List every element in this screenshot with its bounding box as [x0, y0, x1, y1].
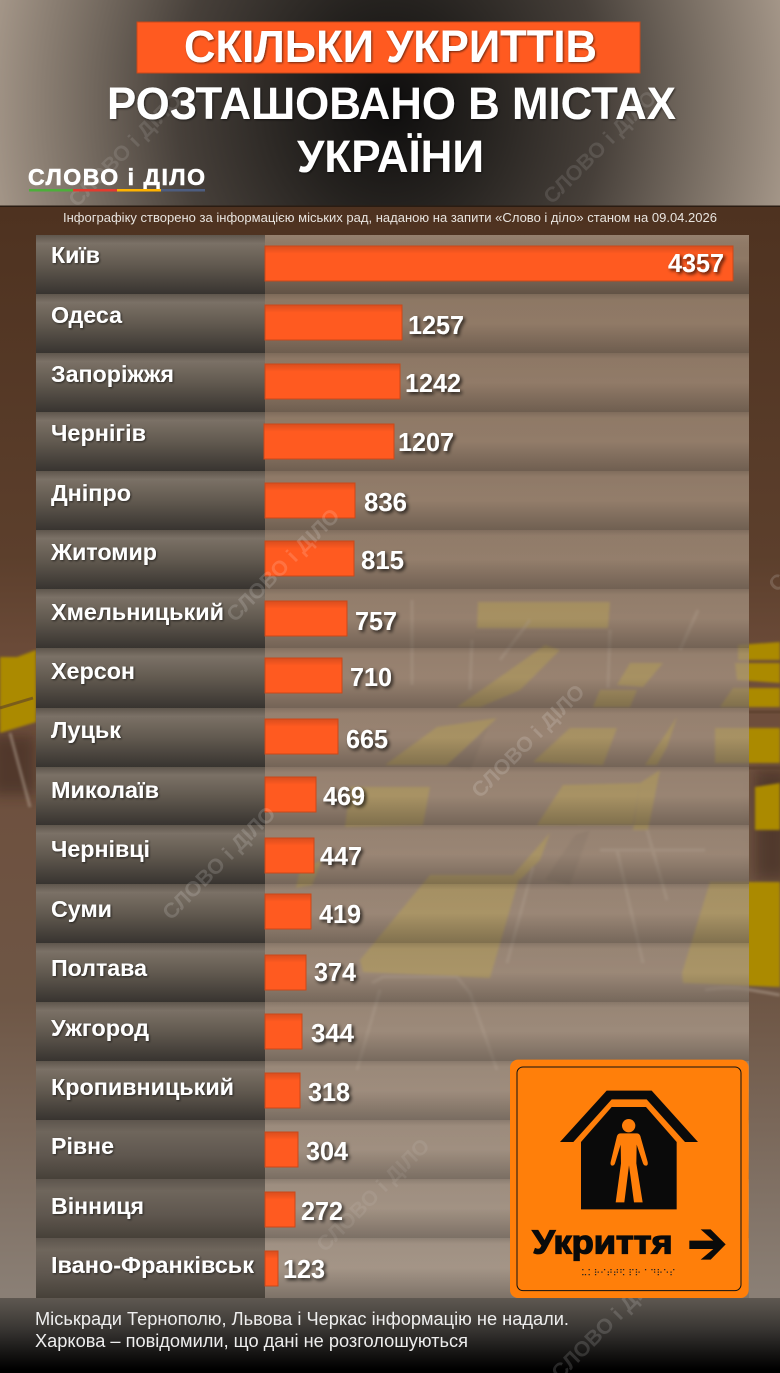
row: Дніпро — [36, 471, 749, 530]
row: Кропивницький: Кропивницький — [51, 1074, 234, 1100]
footer band — [0, 1298, 780, 1373]
row: Київ: Київ — [51, 242, 100, 268]
sign label: Укриття — [532, 1224, 673, 1261]
row: Полтава — [36, 943, 749, 1002]
bar chart — [36, 235, 749, 1298]
row: Івано-Франківськ: Івано-Франківськ — [51, 1252, 254, 1278]
title line 3: УКРАЇНИ — [297, 131, 484, 182]
icon: roof — [560, 1091, 698, 1142]
row: Одеса: Одеса — [51, 302, 122, 328]
panel tint — [265, 235, 749, 1298]
title — [107, 21, 676, 182]
row: Ужгород — [36, 1002, 749, 1061]
row: Полтава: Полтава — [51, 955, 147, 981]
row: Ужгород: Ужгород — [51, 1015, 149, 1041]
icon: person — [611, 1119, 648, 1202]
row: Луцьк: Луцьк — [51, 717, 121, 743]
row: Запоріжжя: 1242 — [405, 368, 461, 398]
watermarks: СЛОВО і ДІЛО — [222, 504, 345, 627]
row: Кропивницький: 318 — [308, 1077, 350, 1107]
row: Чернігів: Чернігів — [51, 420, 146, 446]
title line 2: РОЗТАШОВАНО В МІСТАХ — [107, 78, 676, 129]
row: Запоріжжя — [36, 353, 749, 412]
row: Луцьк: 665 — [346, 724, 388, 754]
row: Херсон: Херсон — [51, 658, 135, 684]
row: Суми: Суми — [51, 896, 112, 922]
row: Чернігів — [36, 412, 749, 471]
row: Чернівці: Чернівці — [51, 836, 150, 862]
title line 1: СКІЛЬКИ УКРИТТІВ — [184, 21, 597, 72]
row: Чернігів: 1207 — [398, 427, 454, 457]
row: Вінниця: Вінниця — [51, 1193, 144, 1219]
row: Хмельницький: Хмельницький — [51, 599, 224, 625]
title highlight box — [137, 22, 640, 73]
icon: shelter sign — [510, 1060, 749, 1298]
row: Хмельницький — [36, 589, 749, 648]
row: Херсон: 710 — [350, 662, 392, 692]
row: Київ: 4357 — [668, 248, 724, 278]
row: Дніпро: 836 — [364, 487, 407, 517]
braille: ⠥⠅⠗⠊⠞⠞⠫ ⠏⠗ ⠁⠙⠗⠑⠎ — [581, 1268, 676, 1279]
row: Житомир — [36, 530, 749, 589]
row: Ужгород: 344 — [311, 1018, 355, 1048]
footer note: Міськради Тернополю, Львова і Черкас інформацію не надали. — [35, 1309, 569, 1329]
header band — [0, 0, 780, 206]
watermarks: СЛОВО і ДІЛО — [467, 680, 590, 803]
row: Івано-Франківськ: 123 — [283, 1254, 325, 1284]
row: Херсон — [36, 648, 749, 708]
watermarks — [158, 474, 780, 1257]
row: Івано-Франківськ — [36, 1238, 749, 1298]
row: Суми: 419 — [319, 899, 361, 929]
icon: arrow — [689, 1229, 726, 1260]
row: Кропивницький — [36, 1061, 749, 1120]
header watermarks: СЛОВО і ДІЛО — [64, 89, 187, 212]
icon: house — [581, 1107, 677, 1209]
row: Луцьк — [36, 708, 749, 767]
row: Чернівці — [36, 825, 749, 884]
footer note — [35, 1309, 569, 1351]
row: Суми — [36, 884, 749, 943]
watermarks: СЛОВО і ДІЛО — [312, 1134, 435, 1257]
header watermarks: СЛОВО і ДІЛО — [539, 86, 662, 209]
row: Рівне: Рівне — [51, 1133, 114, 1159]
row: Запоріжжя: Запоріжжя — [51, 361, 174, 387]
source note: Інфографіку створено за інформацією міських рад, наданою на запити «Слово і діло» станом на 09.04.2026 — [63, 210, 717, 225]
row: Чернівці: 447 — [320, 841, 362, 871]
row: Полтава: 374 — [314, 957, 357, 987]
row: Одеса: 1257 — [408, 310, 464, 340]
row: Миколаїв: 469 — [323, 781, 365, 811]
footer note: Харкова – повідомили, що дані не розголошуються — [35, 1331, 468, 1351]
row: Вінниця: 272 — [301, 1196, 343, 1226]
watermarks: СЛОВО і ДІЛО — [158, 802, 281, 925]
row: Дніпро: Дніпро — [51, 480, 131, 506]
row: Миколаїв: Миколаїв — [51, 777, 159, 803]
row: Житомир: 815 — [361, 545, 404, 575]
logo: СЛОВО і ДІЛО — [28, 164, 205, 190]
header watermarks — [64, 86, 662, 212]
row: Хмельницький: 757 — [355, 606, 397, 636]
row: Київ — [36, 235, 749, 294]
row: Рівне — [36, 1120, 749, 1179]
row: Рівне: 304 — [306, 1136, 349, 1166]
row: Миколаїв — [36, 767, 749, 825]
row: Житомир: Житомир — [50, 539, 157, 565]
row: Вінниця — [36, 1179, 749, 1238]
row: Одеса — [36, 294, 749, 353]
